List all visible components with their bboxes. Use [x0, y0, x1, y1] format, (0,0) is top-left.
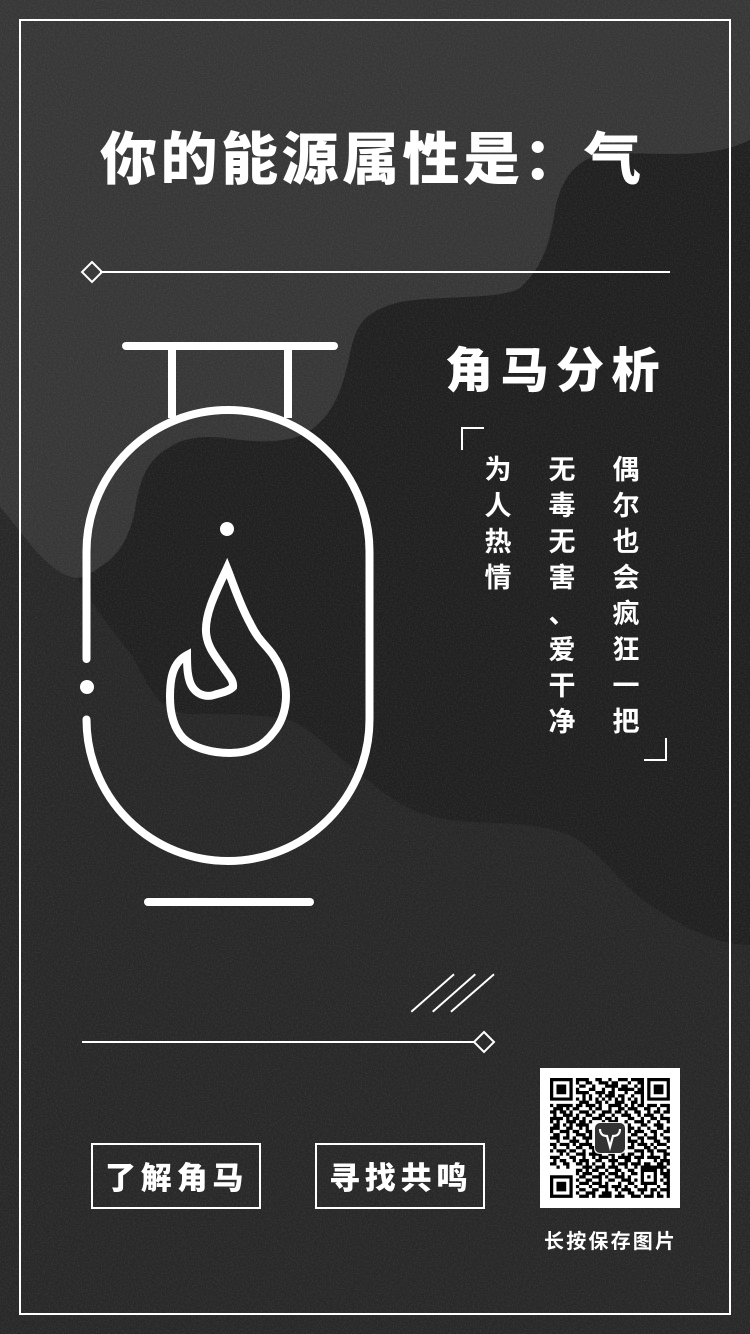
vertical text column 1: 人 — [484, 491, 512, 521]
cylinder top handle — [126, 346, 334, 418]
vertical text column 2: 净 — [548, 707, 576, 737]
top divider with diamond — [80, 260, 670, 284]
vertical text column 2: 毒 — [548, 491, 576, 521]
vertical text column 2: 无 — [548, 455, 576, 485]
vertical text column 2 — [548, 455, 576, 737]
cylinder body — [86, 410, 370, 861]
QR code — [540, 1068, 680, 1208]
vertical text column 3: 偶 — [612, 455, 640, 485]
gas cylinder illustration — [80, 342, 374, 906]
button: learn about Jiaoma: 了解角马 — [105, 1161, 248, 1196]
vertical text column 2: 、 — [548, 599, 576, 629]
vertical text column 1: 为 — [484, 455, 512, 485]
vertical text column 1: 热 — [484, 527, 512, 557]
caption: 长按保存图片 — [544, 1231, 677, 1253]
bottom-right bracket — [644, 738, 667, 761]
cylinder base bar — [148, 898, 310, 906]
vertical text column 3: 尔 — [612, 491, 640, 521]
vertical text column 2: 无 — [548, 527, 576, 557]
vertical text column 1: 情 — [484, 563, 512, 593]
button: find resonance: 寻找共鸣 — [329, 1161, 472, 1196]
vertical text column 3: 把 — [612, 707, 640, 737]
button: find resonance — [315, 1143, 485, 1209]
vertical text column 3: 会 — [612, 563, 640, 593]
title: 你的能源属性是：气 — [100, 128, 644, 192]
cylinder dots — [80, 522, 234, 694]
vertical text column 3 — [612, 455, 640, 737]
vertical text column 3: 疯 — [612, 599, 640, 629]
vertical text column 3: 一 — [612, 671, 640, 701]
vertical text column 3: 也 — [612, 527, 640, 557]
vertical text column 2: 爱 — [548, 635, 576, 665]
vertical text column 3: 狂 — [612, 635, 640, 665]
vertical text column 2: 害 — [548, 563, 576, 593]
subheading: 角马分析 — [445, 345, 667, 398]
top-left bracket — [461, 427, 484, 450]
button: learn about Jiaoma — [91, 1143, 261, 1209]
flame icon — [170, 568, 286, 753]
vertical text column 1 — [484, 455, 512, 593]
vertical text column 2: 干 — [548, 671, 576, 701]
